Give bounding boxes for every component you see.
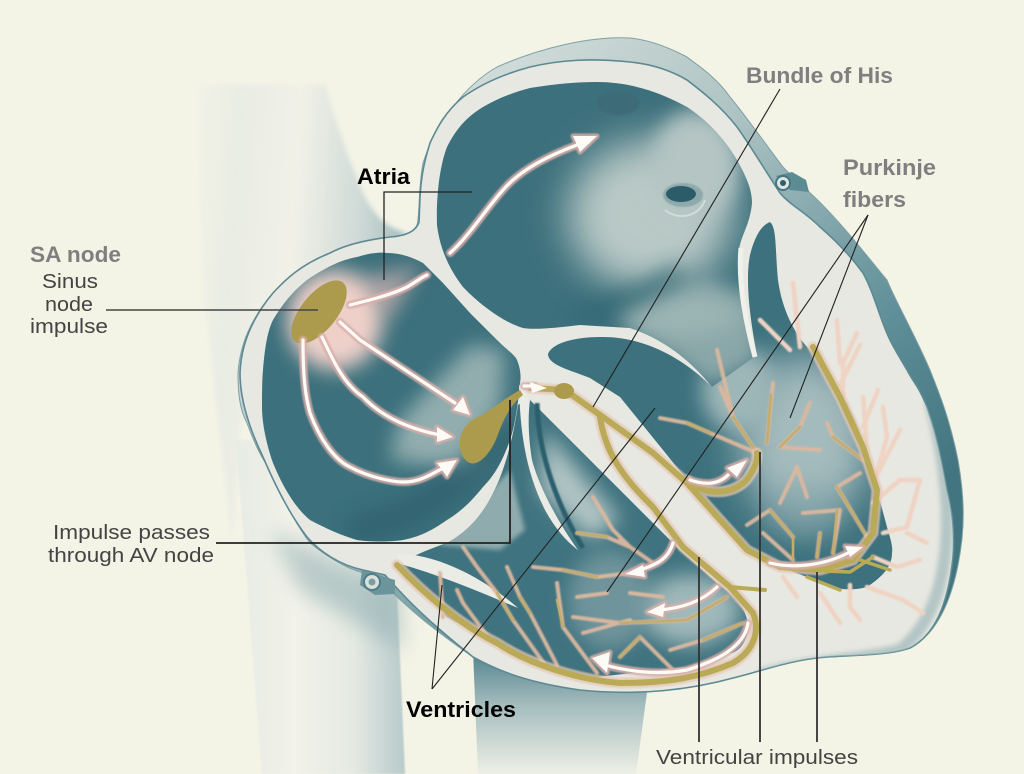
- impulse arrows: [303, 136, 863, 673]
- His bundle node: [554, 383, 574, 399]
- Purkinje network: [440, 350, 867, 673]
- Purkinje pale branches: [760, 283, 927, 623]
- conduction tract: [397, 347, 890, 683]
- arrow shafts: [303, 145, 848, 672]
- conduction tract halo: [397, 347, 877, 683]
- SA node glow: [287, 265, 420, 370]
- label: Bundle of His: Bundle of His: [746, 63, 893, 88]
- label: Ventricular impulses: Ventricular impulses: [656, 747, 858, 769]
- arrow halos: [303, 136, 863, 673]
- label: Purkinje fibers: Purkinje: [843, 155, 936, 180]
- label: Impulse passes through AV node: through AV node: [48, 545, 214, 567]
- arrow heads: [437, 136, 863, 673]
- myocardial wall: [240, 60, 954, 692]
- descending aorta: [473, 650, 648, 774]
- lower vena cava: [236, 440, 405, 774]
- vessel openings: [360, 91, 809, 595]
- label: Sinus node impulse: node: [45, 294, 93, 316]
- lower vessel shading: [270, 530, 402, 650]
- label: Atria: Atria: [357, 164, 411, 189]
- outer sheath: [238, 38, 963, 692]
- chamber: right atrium: [255, 245, 525, 545]
- wall inner shading: [760, 400, 947, 675]
- AV node: [460, 390, 523, 463]
- valve leaflets: [397, 248, 755, 608]
- label: Sinus node impulse: impulse: [30, 316, 108, 338]
- label: Ventricles: Ventricles: [406, 697, 516, 722]
- leader lines: [106, 89, 868, 742]
- chamber: left ventricle: [540, 215, 900, 595]
- upper vena cava: [195, 85, 407, 540]
- vessels: [195, 85, 648, 774]
- label: SA node: SA node: [30, 242, 121, 267]
- label: Impulse passes through AV node: Impulse passes: [53, 522, 210, 544]
- chamber: left atrium: [430, 75, 765, 395]
- chamber: right ventricle: [400, 399, 748, 677]
- label: Purkinje fibers: fibers: [843, 187, 906, 212]
- label: Sinus node impulse: Sinus: [42, 271, 98, 293]
- SA node: [281, 271, 357, 353]
- Purkinje yellow branches: [497, 395, 867, 657]
